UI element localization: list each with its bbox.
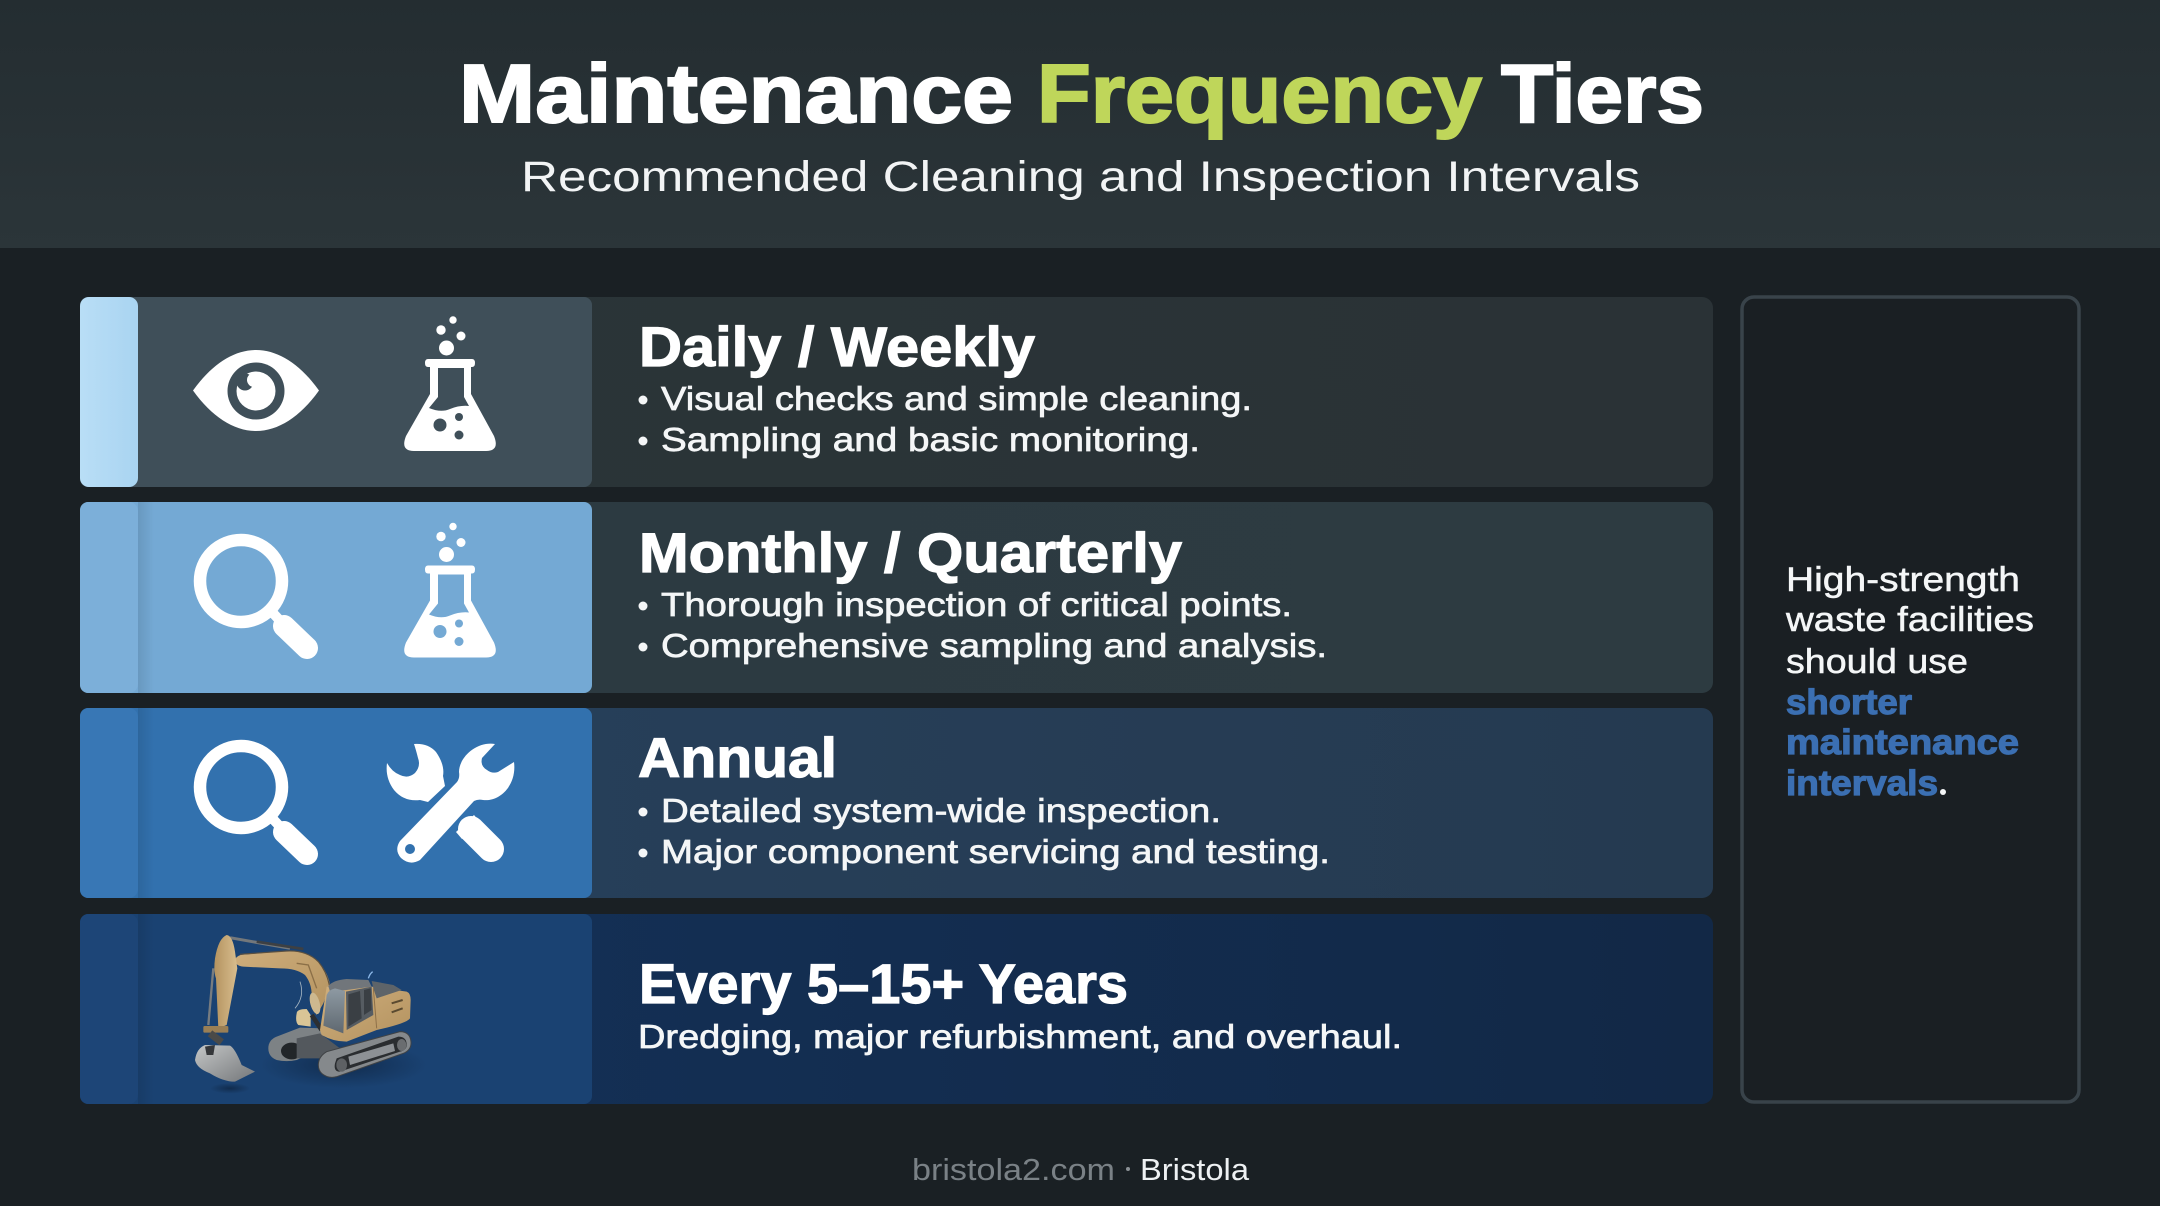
- callout text: should use: [1786, 643, 1968, 681]
- bullet list: [638, 380, 1252, 458]
- footer: [912, 1152, 1250, 1187]
- heading: Annual: [638, 726, 837, 789]
- callout text: shorter: [1786, 683, 1912, 722]
- bullet list: Major component servicing and testing.: [661, 833, 1330, 870]
- title: [459, 47, 1704, 140]
- callout text: High-strength: [1786, 561, 2020, 599]
- icon: flask with bubbles: [404, 316, 496, 451]
- description: Dredging, major refurbishment, and overhaul.: [638, 1018, 1402, 1055]
- callout text: waste facilities: [1785, 601, 2034, 639]
- bullet list: [638, 586, 1327, 664]
- icon: magnifier: [200, 746, 307, 854]
- title: Tiers: [1501, 47, 1704, 140]
- icon: crossed wrenches: [387, 744, 514, 863]
- title: Maintenance: [459, 47, 1013, 140]
- bullet list: Detailed system-wide inspection.: [661, 792, 1221, 829]
- icon: flask with bubbles: [404, 523, 496, 658]
- bullet list: Thorough inspection of critical points.: [661, 586, 1292, 623]
- tier row: daily / weekly: [80, 297, 1713, 487]
- bullet list: [638, 792, 1330, 870]
- callout text: intervals: [1786, 764, 1938, 803]
- callout text: [1785, 561, 2034, 803]
- bullet list: Visual checks and simple cleaning.: [661, 380, 1252, 417]
- bullet list: Comprehensive sampling and analysis.: [661, 627, 1327, 664]
- tier row: monthly / quarterly: [80, 502, 1713, 693]
- title: Frequency: [1037, 47, 1482, 140]
- bullet list: Sampling and basic monitoring.: [661, 421, 1200, 458]
- icon: eye: [193, 350, 319, 431]
- subtitle: Recommended Cleaning and Inspection Intervals: [521, 153, 1640, 201]
- side callout panel: [1742, 297, 2079, 1102]
- tier row: annual: [80, 708, 1713, 898]
- callout text: maintenance: [1786, 723, 2019, 762]
- heading: Daily / Weekly: [639, 315, 1035, 378]
- tier row: every 5-15+ years: [80, 914, 1713, 1104]
- footer: Bristola: [1140, 1152, 1250, 1187]
- footer: bristola2.com: [912, 1152, 1115, 1187]
- icon: magnifier: [200, 540, 307, 648]
- heading: Monthly / Quarterly: [639, 521, 1182, 584]
- icon: excavator: [195, 935, 427, 1094]
- header band: [0, 0, 2160, 248]
- heading: Every 5–15+ Years: [639, 952, 1128, 1015]
